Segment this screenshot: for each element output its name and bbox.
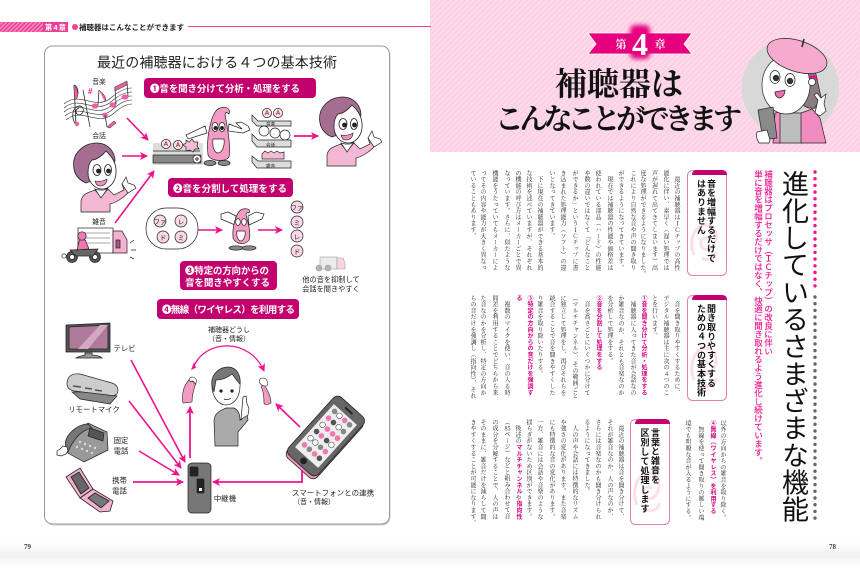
text: き込まれた処理能力（ソフト）の違 <box>559 170 568 271</box>
arrow: music to sorter <box>127 118 148 140</box>
text: にも特徴的な音の変化があります。 <box>548 419 557 520</box>
caption: suppress other sounds: 他の音を抑制して <box>302 275 360 284</box>
icon: sound sorting trays: 会話 <box>266 141 276 148</box>
text: これにより自然な音や声の聞き取り <box>629 170 638 271</box>
heading pill 1: ❶音を聞き分けて分析・処理をする <box>150 83 300 95</box>
text: 一方、雑音には会話や音楽のような <box>536 419 545 520</box>
running header: left page: 補聴器はこんなことができます <box>79 23 184 32</box>
text: きやすくすることが可能になります。 <box>469 419 478 526</box>
text: とを行います。 <box>650 295 660 339</box>
icon: separated sounds column: レ <box>294 234 300 241</box>
icon: mixed sound bubble: ミ <box>178 235 184 242</box>
text: 境でも明瞭な音が入るようにする。 <box>684 420 693 521</box>
body text: words and noise <box>469 419 626 526</box>
arrow: noise to sorter <box>115 171 154 223</box>
running header: left page <box>0 22 431 32</box>
panel: basic technologies <box>44 46 390 526</box>
note heading: four technologies <box>696 304 716 397</box>
note box: words and noise <box>630 419 670 524</box>
text: 音を増幅するだけで <box>706 179 716 263</box>
text: 声が遅れて出てきてしまいます）高 <box>650 170 660 271</box>
note box: four technologies <box>688 295 727 400</box>
body text: middle block <box>469 295 682 399</box>
text: さらには音楽なのかも聞き分けられ <box>594 419 603 520</box>
text: 無線を使って聞き取りの難しい環 <box>697 426 706 521</box>
text: 機能をうたっていてもメーカーによ <box>491 170 500 271</box>
label: mobile phone: 携帯 <box>112 476 127 485</box>
text: 以外の方向からの雑音を取り除く。 <box>719 420 728 521</box>
page bottom shading <box>0 542 860 568</box>
label: smartphone link: （音・情報） <box>293 497 335 506</box>
icon: sound sorting trays: 雑音 <box>266 162 276 169</box>
text: 聞き取りやすくする <box>706 304 716 388</box>
text: 区別して処理します <box>640 428 650 514</box>
chapter title: こんなことができます <box>495 97 742 138</box>
text: らの音だけを強調し（指向性）、それ <box>469 295 478 399</box>
caption: suppress other sounds: 会話を聞きやすく <box>302 284 360 294</box>
icon: right hearing aid <box>259 378 271 404</box>
text: ための４つの基本技術 <box>696 304 706 397</box>
icon: smartphone with apps <box>283 394 368 481</box>
note heading: words and noise <box>640 428 660 514</box>
page number 78: 78 <box>829 543 836 551</box>
icon: left hearing aid <box>182 377 197 403</box>
text: た音なのかを分析し、特定の方向か <box>479 295 488 396</box>
label: mobile phone: 電話 <box>112 486 127 496</box>
icon: hearing aid mascot splitting <box>221 209 264 250</box>
text: 能化に伴い、素早く（遅い処理では <box>662 170 671 271</box>
icon: faded truck <box>316 257 345 271</box>
arrow: out of splitter <box>258 229 282 231</box>
text: （マルチチャンネル）、その範囲ごと <box>571 295 580 399</box>
icon: mixed sound bubble: ファ <box>154 218 166 226</box>
body text: top block <box>469 170 682 277</box>
text: 間差を利用することでどちらから来 <box>491 295 500 396</box>
label: smartphone link <box>292 488 375 506</box>
icon: landline phone <box>57 423 108 462</box>
arrow: remote to relay <box>129 401 181 468</box>
text: 後述の マルチチャンネル や 指向性 <box>514 425 523 520</box>
main heading: 進化しているさまざまな機能 <box>778 170 808 523</box>
text: ④無線（ワイヤレス）を利用する <box>709 420 715 514</box>
caption: suppress other sounds <box>302 275 360 294</box>
icon: separated sounds column: ド <box>294 249 300 256</box>
heading pill 2 <box>168 178 293 197</box>
text: るようになってきました。 <box>583 419 592 495</box>
text: を分析して処理をする。 <box>606 295 615 364</box>
arrow: conversation to sorter <box>122 155 147 157</box>
arrow: relay to hearing aid <box>189 407 191 458</box>
text: に独立して処理をし、再びそれらを <box>559 295 568 396</box>
text: ②音を分割して処理をする <box>595 295 601 371</box>
running header: left page: 第4章 <box>45 23 66 32</box>
text: なっています。さらに、似たような <box>503 170 512 271</box>
text: の成分を分解することで、人の声は <box>491 419 500 520</box>
label: music: 音楽 <box>92 77 106 86</box>
label: landline: 電話 <box>114 446 129 456</box>
text: そのままに、雑音だけを減らして聞 <box>479 419 488 520</box>
text: ができるか」というＩＣチップに書 <box>571 170 580 271</box>
text: ③特定の方向からの音だけを強調す <box>526 295 532 396</box>
icon: sound sorting trays <box>252 108 291 169</box>
label: TV: テレビ <box>114 344 136 353</box>
body text: fourth technology <box>684 420 728 521</box>
text: な技術を述べていますが、それぞれ <box>525 170 534 271</box>
icon: separated sounds column: ファ <box>290 204 304 212</box>
arrow: sorted sound to listener <box>294 135 318 137</box>
icon: person pointing <box>212 367 249 446</box>
text: はありません <box>696 179 706 235</box>
icon: mixed sound bubble: ド <box>160 235 166 242</box>
text: 度な処理ができるようになりました。 <box>639 170 648 277</box>
text: 揺らぎがないため区別ができます。 <box>525 419 534 520</box>
arrowhead: arc start <box>191 362 200 370</box>
icon: separated sounds column: ミ <box>294 220 300 227</box>
note heading: amplify <box>696 179 716 263</box>
text: それが雑音なのか、人の声なのか、 <box>606 419 615 520</box>
arrow: TV to relay <box>131 360 185 462</box>
text: 補聴器はプロセッサ（ＩＣチップ）の改良に伴い <box>764 170 774 355</box>
text: 単に音を増幅するだけではなく、快適に聞き取れるよう進化し続けています。 <box>754 170 764 465</box>
text: 最近の補聴器は音を聞き分けて、 <box>617 425 626 520</box>
text: 音を高さごとにいくつかに分けて <box>583 301 592 396</box>
label: mobile phone <box>112 476 127 496</box>
icon: television <box>66 323 110 358</box>
label: smartphone link: スマートフォンとの連携 <box>292 488 375 498</box>
arrow: arc between hearing aids <box>193 346 264 371</box>
icon: music score <box>64 81 132 128</box>
heading pill 3: 音を聞きやすくする <box>185 277 270 289</box>
icon: remote microphone <box>67 374 118 404</box>
icon: separated sounds column <box>290 201 304 257</box>
text: の機能の呼び方はメーカーごとで異 <box>514 170 523 271</box>
arrow: landline to relay <box>139 451 179 475</box>
arrow: smartphone to right hearing aid <box>276 404 300 427</box>
icon: flip phone <box>66 468 113 512</box>
text: か雑音なのか、それとも音楽なのか <box>617 295 626 396</box>
icon: relay device <box>188 463 211 513</box>
label: landline <box>114 436 129 456</box>
label: relay: 中継機 <box>214 494 237 503</box>
icon: mixed sound bubble <box>146 208 198 249</box>
chapter ribbon: 第 <box>616 36 626 52</box>
chapter ribbon: 章 <box>654 36 666 52</box>
text: 音を聞き取りやすくするために、 <box>673 301 682 396</box>
icon: girl with beret <box>742 32 839 143</box>
icon: music score: # <box>88 87 93 96</box>
text: 複数のマイクを使い、音の入る時 <box>503 301 512 396</box>
dotted rule <box>813 172 817 523</box>
heading pill 1 <box>144 78 316 98</box>
icon: talking woman right <box>320 97 382 166</box>
text: 統合することで音を聞きやすくした <box>548 295 557 396</box>
panel title: 最近の補聴器における４つの基本技術 <box>97 54 337 70</box>
heading pill 4: ❹無線（ワイヤレス）を利用する <box>162 304 295 316</box>
icon: mixed sound bubble: レ <box>178 219 184 226</box>
chapter title <box>495 59 742 138</box>
icon: hearing aid mascot sorting <box>186 107 250 166</box>
text: ①音を聞き分けて分析・処理をする <box>640 295 646 396</box>
page number 79: 79 <box>24 543 32 551</box>
text: 下に現在の補聴器ができる基本的 <box>536 176 545 271</box>
icon: talking woman left <box>74 143 136 212</box>
heading pill 3: ❸特定の方向からの <box>185 265 269 277</box>
text: （ 85 ページ）などと組み合わせて音 <box>503 419 512 520</box>
text: り雑音を取り除いたりする。 <box>536 295 545 377</box>
label: between hearing aids: （音・情報） <box>208 334 250 343</box>
text: 最近の補聴器はＩＣチップの高性 <box>673 176 682 271</box>
chapter header band <box>430 0 860 152</box>
icon: sound sorting trays: 音楽 <box>266 121 276 128</box>
text: 人の声や会話には特徴的なリズム <box>571 425 580 520</box>
arrow: mobile to relay <box>133 481 183 483</box>
heading pill 2: ❷音を分割して処理をする <box>173 183 287 195</box>
label: between hearing aids <box>208 325 250 343</box>
text: ってその内容や能力が大きく異なっ <box>479 170 488 271</box>
chapter title: 補聴器は <box>555 59 683 105</box>
label: between hearing aids: 補聴器どうし <box>208 325 250 334</box>
heading pill 3 <box>180 261 277 290</box>
text: デジタル補聴器は主に次の４つのこ <box>662 295 671 396</box>
chapter ribbon <box>588 25 692 62</box>
note box: amplify <box>688 170 727 276</box>
heading pill 4 <box>157 299 299 319</box>
lead text <box>754 170 774 465</box>
icon: truck and motorbike <box>62 228 136 262</box>
label: landline: 固定 <box>114 436 129 445</box>
arrow: into splitter <box>198 229 222 231</box>
text: る <box>515 295 521 301</box>
label: remote mic: リモートマイク <box>68 405 120 414</box>
text: や強さの変化があります。また音楽 <box>559 419 568 520</box>
text: ができるようになってきています。 <box>617 170 626 271</box>
arrow: smartphone to relay <box>213 470 302 482</box>
text: いとなってきています。 <box>548 170 557 239</box>
text: 言葉と雑音を <box>650 428 660 484</box>
text: 現在では補聴器の性能や価格差は <box>606 176 615 271</box>
text: や数の違いではなくて「どんなこと <box>583 170 592 271</box>
text: ていることもあります。 <box>469 170 478 239</box>
text: 使われている部品（ハード）の性能 <box>594 170 603 271</box>
chapter ribbon: 4 <box>632 26 648 62</box>
label: noise: 雑音 <box>92 217 106 226</box>
text: 補聴器に入ってきた音が会話なの <box>629 301 638 396</box>
icon: conveyor belt with sounds <box>153 139 203 165</box>
label: conversation: 会話 <box>92 131 106 140</box>
